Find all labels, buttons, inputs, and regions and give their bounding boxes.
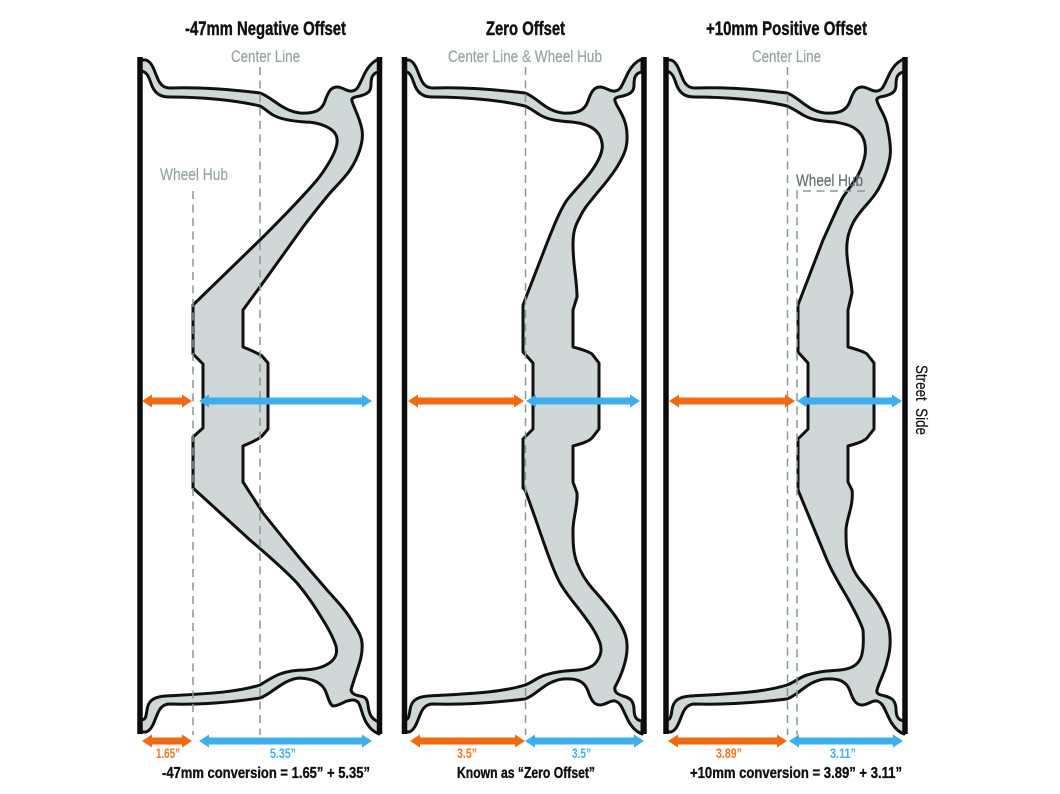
label: center line and wheel hub: Center Line & Wheel Hub bbox=[448, 47, 602, 66]
arrow: backspacing mid bbox=[142, 394, 192, 408]
label: street side: Street Side bbox=[912, 365, 930, 435]
dashed line: center line bbox=[524, 67, 526, 735]
arrow: frontspacing mid bbox=[526, 394, 640, 408]
wheel cross-section: zero offset bbox=[404, 59, 642, 734]
arrow: frontspacing mid bbox=[797, 394, 902, 408]
panel: zero offset bbox=[404, 18, 644, 782]
label: wheel hub: Wheel Hub bbox=[796, 171, 863, 190]
value: 1.65 inches: 1.65” bbox=[156, 745, 180, 761]
caption: positive conversion: +10mm conversion = 3.89” + 3.11” bbox=[690, 765, 902, 782]
dashed line: center line bbox=[259, 67, 261, 735]
caption: known as zero offset: Known as “Zero Offset” bbox=[457, 765, 595, 782]
right rim edge bbox=[377, 57, 382, 734]
panel: positive offset bbox=[666, 18, 905, 782]
dashed line: wheel hub bbox=[192, 191, 194, 735]
value: 3.5 inches front: 3.5” bbox=[572, 745, 591, 761]
left rim edge bbox=[137, 57, 143, 734]
value: 3.11 inches: 3.11” bbox=[830, 745, 856, 761]
dashed line: wheel hub bbox=[797, 191, 865, 735]
wheel cross-section: positive offset bbox=[666, 59, 904, 734]
wheel cross-section: negative offset bbox=[141, 59, 379, 734]
value: 5.35 inches: 5.35” bbox=[270, 745, 296, 761]
arrow: frontspacing bottom bbox=[199, 734, 372, 748]
value: 3.5 inches back: 3.5” bbox=[457, 745, 477, 761]
label: center line: Center Line bbox=[752, 47, 821, 66]
arrow: backspacing mid bbox=[408, 394, 524, 408]
left rim edge bbox=[663, 57, 669, 734]
left rim edge bbox=[402, 57, 407, 734]
arrow: frontspacing bottom bbox=[789, 734, 903, 748]
arrow: backspacing bottom bbox=[410, 734, 525, 748]
label: wheel hub: Wheel Hub bbox=[160, 165, 228, 184]
heading: zero offset: Zero Offset bbox=[486, 18, 565, 40]
arrow: frontspacing bottom bbox=[525, 734, 644, 748]
panel: negative offset bbox=[140, 18, 380, 782]
arrow: frontspacing mid bbox=[199, 394, 372, 408]
arrow: backspacing bottom bbox=[142, 734, 192, 748]
arrow: backspacing bottom bbox=[668, 734, 787, 748]
value: 3.89 inches: 3.89” bbox=[716, 745, 742, 761]
arrow: backspacing mid bbox=[669, 394, 795, 408]
heading: positive offset: +10mm Positive Offset bbox=[706, 18, 867, 40]
dashed line: center line bbox=[786, 67, 788, 735]
heading: negative offset: -47mm Negative Offset bbox=[185, 18, 346, 40]
right rim edge bbox=[641, 57, 647, 734]
right rim edge bbox=[902, 57, 908, 734]
label: center line: Center Line bbox=[231, 47, 300, 66]
caption: negative conversion: -47mm conversion = 1.65” + 5.35” bbox=[162, 765, 370, 782]
